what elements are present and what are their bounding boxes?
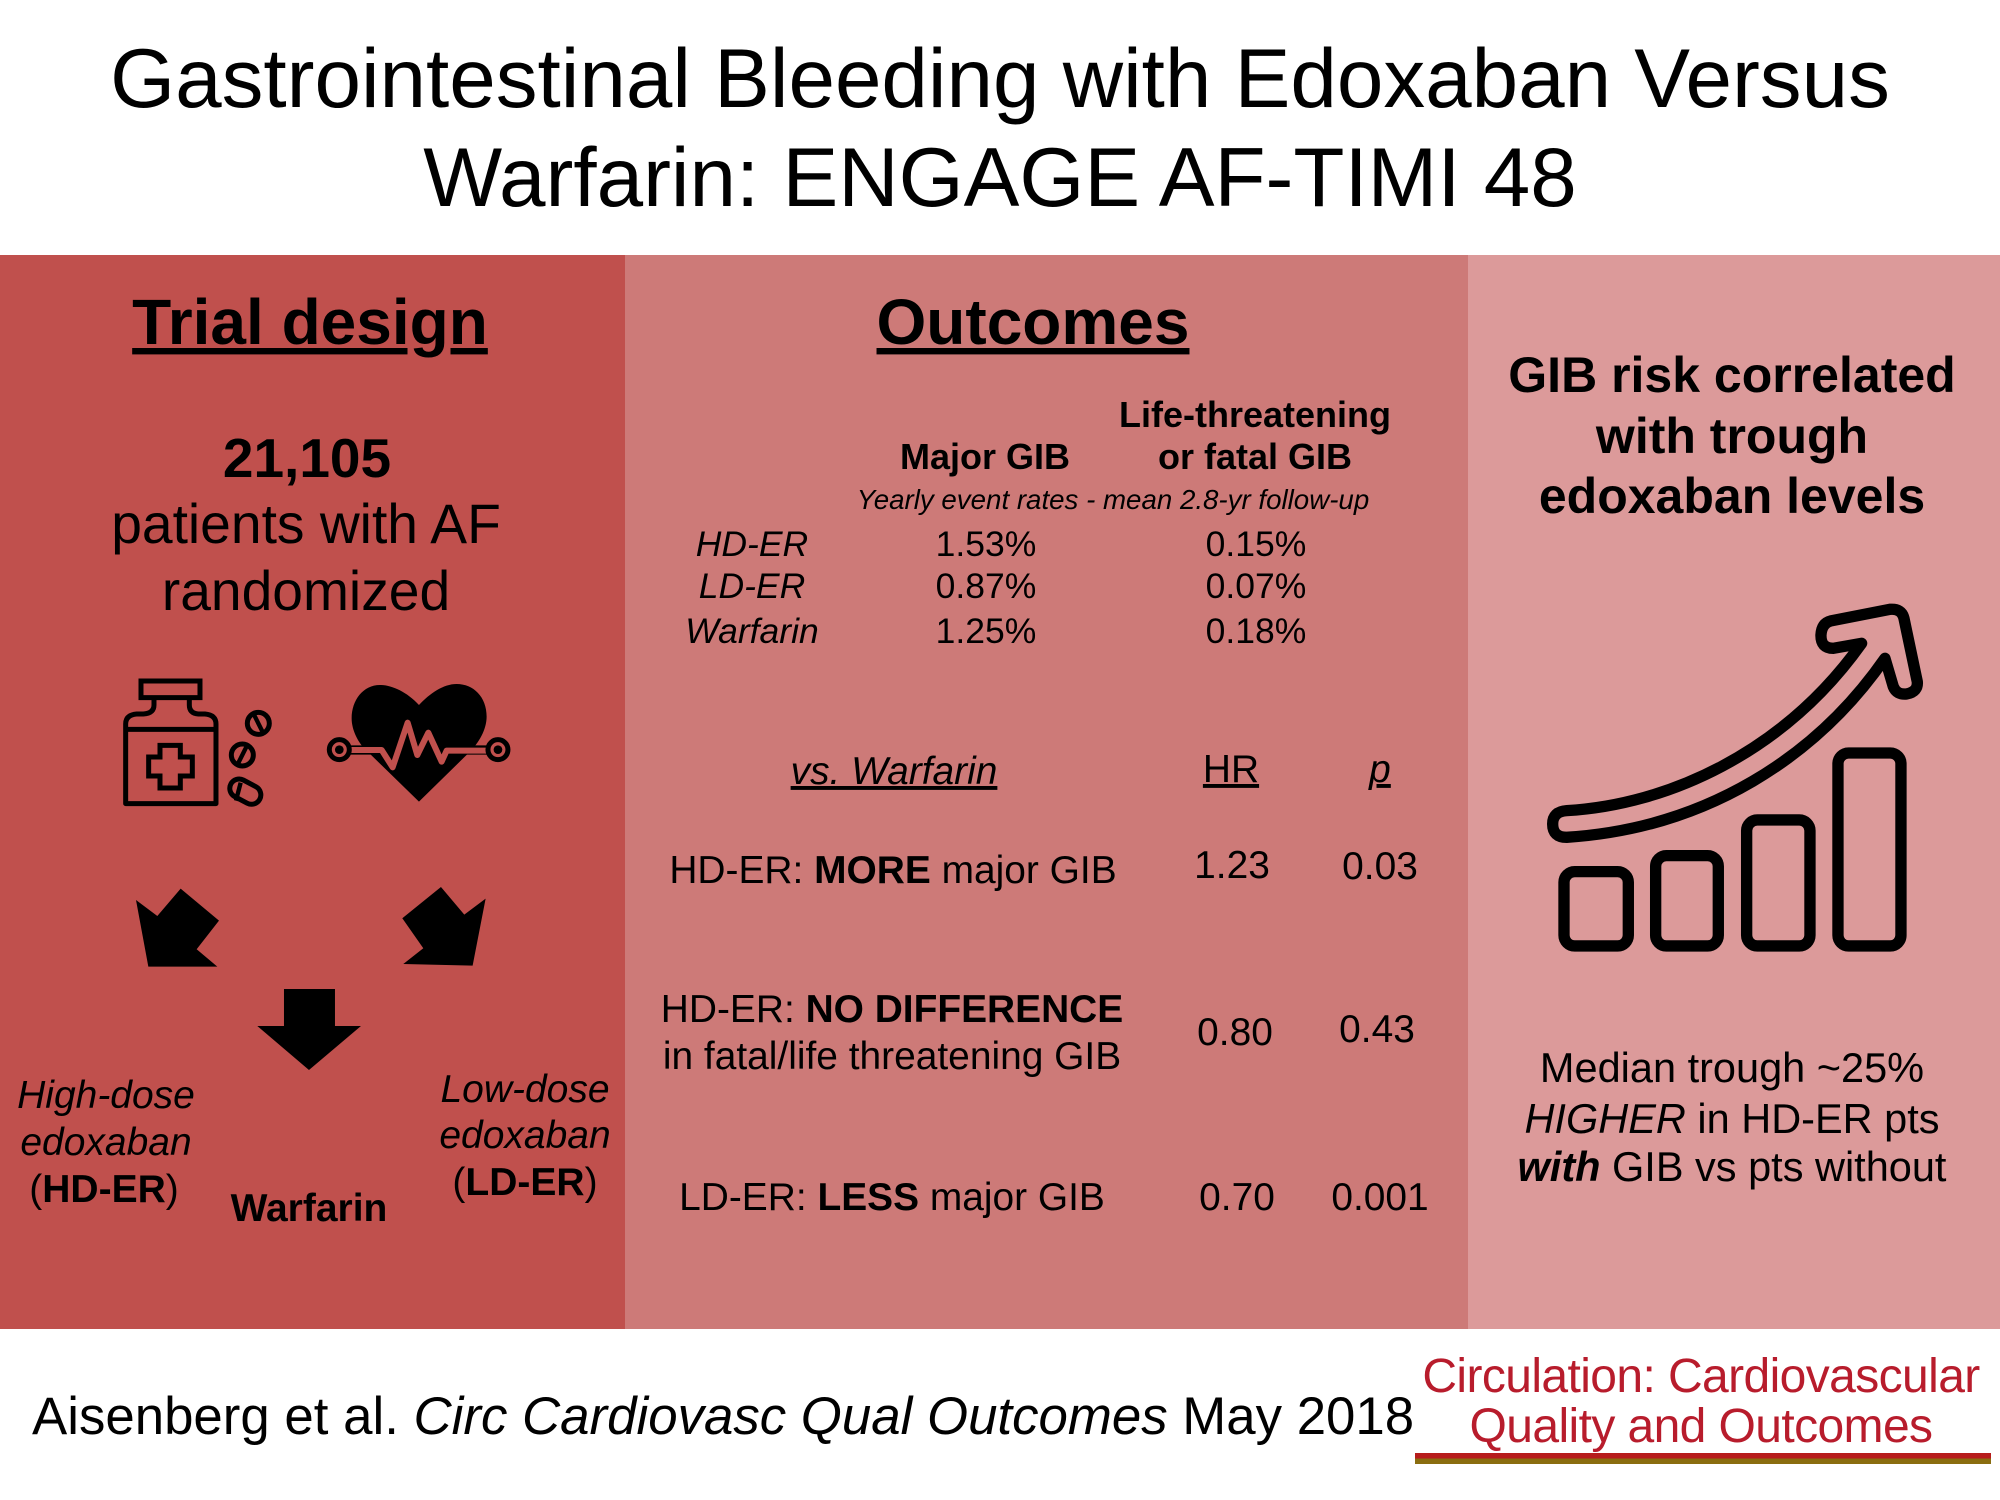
title	[110, 31, 1890, 224]
label: high-dose edoxaban arm	[17, 1074, 195, 1211]
table: comparison versus warfarin: p	[1368, 748, 1391, 791]
table: comparison versus warfarin: LD-ER: LESS major GIB	[679, 1176, 1105, 1219]
label: low-dose edoxaban arm: edoxaban	[439, 1114, 611, 1157]
heading: GIB risk correlated	[1508, 347, 1956, 524]
table: yearly event rates: 0.18%	[1206, 611, 1306, 651]
table: comparison versus warfarin: 0.80	[1197, 1011, 1273, 1054]
table: comparison versus warfarin	[661, 748, 1429, 1219]
panel: GIB risk and trough levels	[1468, 255, 2000, 1329]
table: comparison versus warfarin: in fatal/life threatening GIB	[663, 1035, 1121, 1078]
table: comparison versus warfarin: 0.03	[1342, 845, 1418, 888]
text block: patients randomized: 21,105	[223, 427, 391, 489]
table: yearly event rates	[685, 394, 1391, 651]
table: comparison versus warfarin: 0.43	[1339, 1008, 1415, 1051]
label: low-dose edoxaban arm: (LD-ER)	[452, 1161, 598, 1204]
heading: GIB risk correlated: GIB risk correlated	[1508, 347, 1956, 403]
table: yearly event rates: Yearly event rates - mean 2.8-yr follow-up	[857, 484, 1369, 515]
icon: medicine bottle and pills	[126, 681, 269, 808]
text block: median trough: Median trough ~25%	[1540, 1044, 1924, 1091]
table: comparison versus warfarin: 0.70	[1199, 1176, 1275, 1219]
label: high-dose edoxaban arm: edoxaban	[20, 1121, 192, 1164]
table: yearly event rates: 1.25%	[936, 611, 1036, 651]
title: Gastrointestinal Bleeding with Edoxaban Versus	[110, 31, 1890, 125]
citation: Aisenberg et al. Circ Cardiovasc Qual Outcomes May 2018	[32, 1387, 1414, 1446]
journal logo: Quality and Outcomes	[1470, 1400, 1932, 1453]
label: warfarin arm: Warfarin	[231, 1187, 387, 1230]
heading: GIB risk correlated: edoxaban levels	[1539, 468, 1925, 524]
text block: patients randomized: patients with AF	[111, 493, 501, 555]
icon: rising bar chart with arrow	[1553, 609, 1917, 946]
text block: patients randomized: randomized	[162, 560, 450, 622]
journal logo: Circulation: Cardiovascular	[1422, 1350, 1980, 1403]
table: yearly event rates: 0.87%	[936, 566, 1036, 606]
label: low-dose edoxaban arm	[439, 1068, 611, 1204]
table: comparison versus warfarin: HD-ER: NO DIFFERENCE	[661, 988, 1123, 1031]
table: yearly event rates: 0.07%	[1206, 566, 1306, 606]
label: high-dose edoxaban arm: High-dose	[17, 1074, 195, 1117]
heading: trial design: Trial design	[132, 286, 488, 358]
panel: trial design	[0, 255, 625, 1329]
text block: median trough: HIGHER in HD-ER pts	[1524, 1095, 1940, 1142]
table: yearly event rates: Major GIB	[900, 436, 1070, 477]
table: yearly event rates: LD-ER	[699, 566, 805, 606]
text block: patients randomized	[111, 427, 501, 622]
arrow: down-left to high-dose edoxaban	[136, 889, 219, 967]
table: comparison versus warfarin: 0.001	[1331, 1176, 1429, 1219]
table: yearly event rates: 1.53%	[936, 524, 1036, 564]
text block: median trough	[1518, 1044, 1947, 1190]
table: yearly event rates: Life-threatening	[1119, 394, 1391, 435]
heading: GIB risk correlated: with trough	[1595, 408, 1868, 464]
table: comparison versus warfarin: HD-ER: MORE major GIB	[669, 849, 1117, 892]
table: yearly event rates: HD-ER	[696, 524, 808, 564]
table: yearly event rates: 0.15%	[1206, 524, 1306, 564]
label: high-dose edoxaban arm: (HD-ER)	[29, 1168, 179, 1211]
text block: median trough: with GIB vs pts without	[1518, 1143, 1947, 1190]
table: yearly event rates: Warfarin	[685, 611, 819, 651]
label: low-dose edoxaban arm: Low-dose	[440, 1068, 610, 1111]
table: comparison versus warfarin: 1.23	[1194, 844, 1270, 887]
table: yearly event rates: or fatal GIB	[1158, 436, 1352, 477]
icon: heart with ECG trace	[329, 684, 508, 802]
heading: outcomes: Outcomes	[877, 286, 1189, 358]
title: Warfarin: ENGAGE AF-TIMI 48	[423, 130, 1577, 224]
journal logo	[1415, 1350, 1991, 1464]
arrow: down to warfarin	[257, 989, 361, 1070]
table: comparison versus warfarin: HR	[1203, 748, 1259, 791]
arrow: down-right to low-dose edoxaban	[402, 887, 486, 966]
table: comparison versus warfarin: vs. Warfarin	[791, 750, 997, 793]
panel: outcomes	[625, 255, 1468, 1329]
